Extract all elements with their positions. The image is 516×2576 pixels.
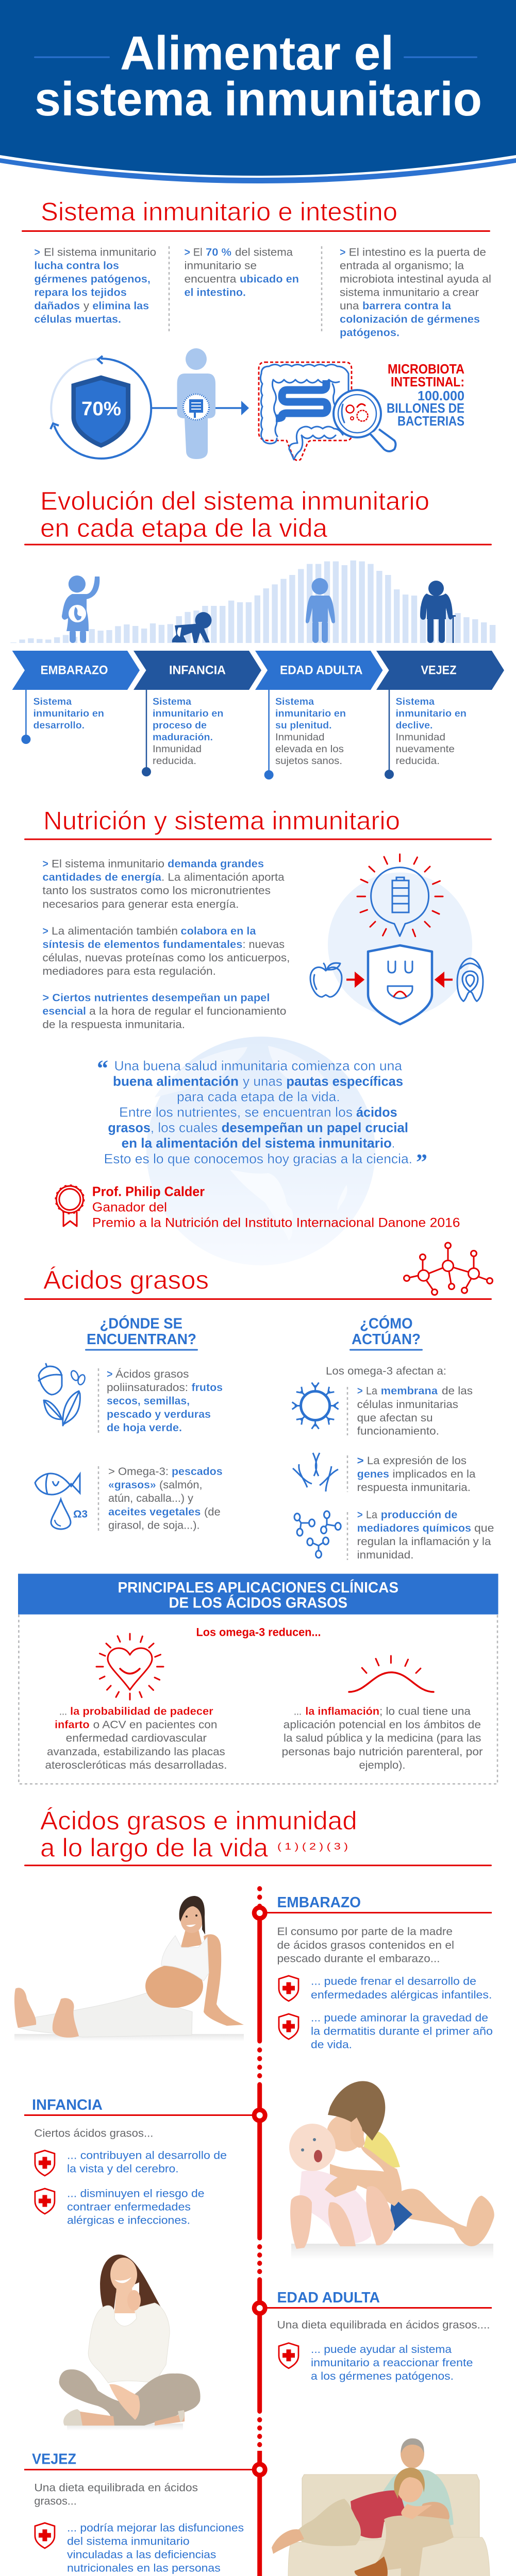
stage note: vejez	[385, 690, 467, 779]
text: infarto: infarto	[55, 1719, 90, 1731]
stage note: embarazo: Sistema	[33, 696, 72, 707]
text: genes: genes	[357, 1468, 389, 1480]
text block: nutrición: . La alimentación aporta	[161, 872, 285, 884]
heading: ácidos grasos	[24, 1266, 492, 1300]
text block: nutrición: a la hora de regular el funcionamiento	[89, 1006, 286, 1018]
stage: vejez: vinculadas a las deficiencias	[67, 2549, 216, 2561]
text: inflamación: personas bajo nutrición parenteral, por	[281, 1746, 483, 1758]
stage: vejez: grasos...	[34, 2495, 77, 2507]
stage note: vejez: reducida.	[396, 755, 440, 767]
stage: edad adulta: a los gérmenes patógenos.	[311, 2370, 454, 2382]
icon: nuts and leaves	[39, 1364, 86, 1426]
stage note: infancia: proceso de	[153, 720, 207, 731]
text block: nutrición: La alimentación también	[52, 925, 178, 937]
icon: shield with cross	[279, 2343, 298, 2368]
text: ácidos grasos poliinsaturados: secos, semillas,	[107, 1395, 190, 1407]
heading: nutrición	[24, 806, 492, 840]
text: inflamación: la salud pública y la medicina (para las	[284, 1733, 481, 1744]
icon: shield with cross	[35, 2150, 55, 2176]
text block: nutrición: mediadores para esta regulación.	[42, 965, 216, 977]
text: omega-3: > Omega-3:	[108, 1466, 169, 1478]
icon: crawling baby	[172, 612, 211, 643]
heading: sistema inmunitario e intestino	[22, 197, 490, 232]
text: mediadores	[357, 1509, 494, 1561]
text: los omega-3 afectan a: Los omega-3 afectan a:	[326, 1365, 446, 1377]
text block: nutrición: demanda grandes	[168, 858, 264, 870]
stage: infancia: Ciertos ácidos grasos...	[34, 2128, 153, 2139]
text: mediadores: >	[357, 1509, 363, 1521]
stage note: vejez: Sistema	[396, 696, 435, 707]
stage note: embarazo: inmunitario en	[33, 708, 104, 719]
heading: evolución: en cada etapa de la vida	[40, 514, 327, 543]
text: omega-3: girasol, de soja...).	[108, 1520, 200, 1531]
heading: evolución: Evolución del sistema inmunitario	[40, 486, 429, 515]
stage note: embarazo: desarrollo.	[33, 720, 85, 731]
text: inflamación: aplicación potencial en los ámbitos de	[284, 1719, 481, 1731]
stage: embarazo: El consumo por parte de la madre	[277, 1926, 453, 1938]
chevrons: life stages: INFANCIA	[169, 664, 226, 677]
text: genes	[357, 1455, 476, 1494]
text: mediadores: producción de	[381, 1509, 457, 1521]
banner: aplicaciones clínicas: PRINCIPALES APLICACIONES CLÍNICAS	[118, 1579, 398, 1596]
text block: nutrición: > Ciertos nutrientes desempeñan un papel	[42, 992, 270, 1004]
stage note: infancia: Inmunidad	[153, 743, 202, 755]
quote: ”	[416, 1149, 427, 1175]
heading: cómo actúan: ¿CÓMO	[360, 1315, 413, 1332]
text: omega-3: «grasos»	[108, 1479, 156, 1491]
text column: lucha contra patógenos	[34, 246, 156, 326]
icon: adult	[306, 578, 335, 643]
stage note: embarazo	[21, 690, 104, 744]
stage: infancia: alérgicas e infecciones.	[67, 2215, 190, 2227]
stage: vejez: ... podría mejorar las disfunciones	[67, 2522, 244, 2534]
quote: Entre los nutrientes, se encuentran los	[119, 1105, 353, 1120]
icon: fish and omega-3 drop: Ω3	[73, 1509, 88, 1520]
quote author: Prof. Philip Calder	[92, 1183, 205, 1199]
text: mediadores: que	[474, 1522, 494, 1534]
icon: fish and omega-3 drop	[35, 1473, 88, 1529]
quote: .	[392, 1135, 395, 1150]
text: mediadores: inmunidad.	[357, 1549, 413, 1561]
text column: lucha contra patógenos: elimina las	[92, 300, 149, 312]
stage: edad adulta: Una dieta equilibrada en ácidos grasos....	[277, 2319, 490, 2331]
icon: shield 70% with cycle arrows	[51, 356, 151, 459]
heading: dónde se encuentran: ¿DÓNDE SE	[100, 1315, 182, 1332]
text: inflamación	[281, 1706, 483, 1771]
icon: inflammation curve	[349, 1656, 434, 1692]
quote: “	[97, 1056, 108, 1081]
stage note: edad adulta	[264, 690, 346, 779]
icon: shield with cross	[35, 2189, 55, 2214]
callout: microbiota intestinal: MICROBIOTA	[388, 361, 464, 377]
text: omega-3: pescados	[172, 1466, 223, 1478]
title: Alimentar el	[120, 26, 394, 80]
text: ácidos grasos poliinsaturados: >	[107, 1368, 112, 1380]
text: omega-3: (de	[204, 1506, 221, 1518]
text block: nutrición	[42, 858, 290, 1031]
text: membrana: que afectan su	[357, 1412, 433, 1424]
quote author: Premio a la Nutrición del Instituto Internacional Danone 2016	[92, 1215, 460, 1230]
stage: vejez	[24, 2451, 254, 2576]
stage: infancia: ... disminuyen el riesgo de	[67, 2188, 204, 2200]
callout: microbiota intestinal: INTESTINAL:	[391, 374, 464, 389]
text block: nutrición: >	[42, 858, 48, 870]
text: omega-3: aceites vegetales	[108, 1506, 201, 1518]
text: omega-3: atún, caballa...) y	[108, 1493, 194, 1504]
text column: lucha contra patógenos: y	[84, 300, 90, 312]
text: infarto: o ACV en pacientes con	[93, 1719, 217, 1731]
bar chart: immune system over life	[10, 561, 495, 643]
icon: shield 70% with cycle arrows: 70%	[81, 398, 121, 420]
text column: 70 %: encuentra	[185, 273, 237, 285]
stage: infancia: la vista y del cerebro.	[67, 2163, 179, 2175]
text: infarto: la probabilidad de padecer	[70, 1706, 213, 1718]
text block: nutrición: El sistema inmunitario	[52, 858, 164, 870]
chevrons: life stages: EMBARAZO	[40, 664, 108, 677]
title: sistema inmunitario	[35, 72, 482, 126]
text column: lucha contra patógenos: >	[34, 246, 40, 259]
stage note: vejez: nuevamente	[396, 743, 455, 755]
stage note: edad adulta: inmunitario en	[275, 708, 346, 719]
chevrons: life stages: EDAD ADULTA	[280, 664, 363, 677]
text: infarto: ateroscleróticas más desarrolladas.	[45, 1759, 227, 1771]
text: inflamación: ...	[294, 1706, 302, 1718]
text: inflamación: ; lo cual tiene una	[379, 1706, 471, 1718]
heading: evolución	[24, 486, 492, 545]
text: infarto	[45, 1706, 227, 1771]
background: globe	[146, 1037, 375, 1265]
stage: edad adulta	[266, 2290, 492, 2382]
text column: puerta de entrada: >	[340, 246, 345, 259]
icon: shield with cross	[279, 1976, 298, 2001]
stage: embarazo: enfermedades alérgicas infantiles.	[311, 1989, 492, 2001]
text: ácidos grasos poliinsaturados: poliinsaturados:	[107, 1382, 188, 1394]
timeline: red line with nodes	[246, 1886, 273, 2576]
text block: nutrición: células, nuevas proteínas como los anticuerpos,	[42, 952, 290, 964]
text: membrana: funcionamiento.	[357, 1425, 439, 1437]
heading: ácidos grasos e inmunidad: ( 1 ) ( 2 ) ( 3 )	[277, 1841, 348, 1852]
icon: heart	[96, 1634, 163, 1700]
text: membrana: membrana	[381, 1385, 438, 1397]
photo: boy hugging baby	[289, 2081, 494, 2259]
text: ácidos grasos poliinsaturados	[107, 1368, 223, 1434]
text column: 70 %: 70 %	[206, 246, 231, 259]
quote	[97, 1056, 427, 1175]
text: membrana: células inmunitarias	[357, 1399, 458, 1411]
stage note: infancia: inmunitario en	[153, 708, 224, 719]
stage note: vejez: declive.	[396, 720, 433, 731]
chevrons: life stages	[12, 651, 504, 690]
stage note: infancia: reducida.	[153, 755, 196, 767]
text column: lucha contra patógenos: gérmenes patógenos,	[34, 273, 151, 285]
photo: pregnant woman	[14, 1896, 244, 2041]
stage: infancia	[24, 2097, 254, 2227]
stage: infancia: contraer enfermedades	[67, 2201, 191, 2213]
banner: aplicaciones clínicas	[18, 1574, 498, 1615]
text: infarto: enfermedad cardiovascular	[66, 1733, 207, 1744]
text block: nutrición: de la respuesta inmunitaria.	[42, 1019, 185, 1031]
icon: pregnant woman	[62, 575, 99, 643]
quote author	[92, 1183, 460, 1230]
stage: embarazo: ... puede aminorar la gravedad de	[311, 2012, 488, 2024]
stage: vejez: VEJEZ	[32, 2451, 76, 2468]
stage: vejez: del sistema inmunitario	[67, 2536, 190, 2548]
quote: , los cuales	[151, 1120, 218, 1135]
heading: ácidos grasos e inmunidad: Ácidos grasos e inmunidad	[40, 1806, 357, 1835]
text column: 70 %: el intestino.	[185, 286, 246, 298]
stage note: edad adulta: Inmunidad	[275, 732, 325, 743]
stage note: vejez: inmunitario en	[396, 708, 467, 719]
text column: lucha contra patógenos: El sistema inmunitario	[44, 246, 156, 259]
text block: nutrición: cantidades de energía	[42, 872, 161, 884]
icon: human body with intestine and arrow	[151, 348, 249, 459]
text: mediadores: regulan la inflamación y la	[357, 1536, 491, 1548]
stage note: edad adulta: sujetos sanos.	[275, 755, 342, 767]
heading: dónde se encuentran	[85, 1315, 198, 1351]
stage note: infancia: Sistema	[153, 696, 191, 707]
stage: embarazo: EMBARAZO	[277, 1894, 361, 1911]
text block: nutrición: tanto los sustratos como los micronutrientes	[42, 885, 271, 897]
text: omega-3	[108, 1466, 223, 1531]
quote: ácidos	[356, 1105, 397, 1120]
icon: chemical mediators	[294, 1511, 341, 1558]
title	[35, 26, 482, 126]
text: inflamación: ejemplo).	[359, 1759, 405, 1771]
chevrons: life stages: VEJEZ	[421, 664, 457, 677]
stage: edad adulta: inmunitario a reaccionar frente	[311, 2357, 473, 2369]
stage: embarazo: de vida.	[311, 2039, 352, 2051]
text column: 70 %: ubicado en	[240, 273, 299, 285]
photo: woman sitting cross-legged	[59, 2255, 201, 2431]
text block: nutrición: colabora en la	[180, 925, 256, 937]
text column: puerta de entrada: colonización de gérmenes	[340, 313, 480, 326]
icon: genes	[293, 1453, 338, 1492]
text: genes: respuesta inmunitaria.	[357, 1482, 471, 1494]
text column: lucha contra patógenos: dañados	[34, 300, 80, 312]
heading: dónde se encuentran: ENCUENTRAN?	[87, 1331, 196, 1348]
text column: 70 %: inmunitario se	[185, 260, 257, 272]
quote: buena alimentación	[113, 1073, 239, 1089]
text column: puerta de entrada: microbiota intestinal ayuda al	[340, 273, 491, 285]
stage note: edad adulta: Sistema	[275, 696, 314, 707]
text: ácidos grasos poliinsaturados: de hoja verde.	[107, 1422, 182, 1434]
text column: 70 %: del sistema	[235, 246, 293, 259]
icon: shield with cross	[35, 2523, 55, 2548]
text: inflamación: la inflamación	[305, 1706, 379, 1718]
text block: nutrición: esencial	[42, 1006, 86, 1018]
callout: microbiota intestinal: BACTERIAS	[397, 413, 464, 429]
callout: microbiota intestinal: 100.000	[418, 388, 464, 403]
text column: 70 %: El	[193, 246, 203, 259]
quote author: Ganador del	[92, 1200, 167, 1214]
text: membrana: La	[366, 1385, 377, 1397]
text block: nutrición: : nuevas	[242, 939, 285, 951]
quote: grasos	[108, 1120, 151, 1135]
text column: puerta de entrada: entrada al organismo; la	[340, 260, 464, 272]
icon: elderly person with cane	[420, 581, 456, 643]
heading: ácidos grasos e inmunidad: a lo largo de la vida	[40, 1833, 268, 1862]
header banner	[0, 0, 516, 183]
text: infarto: ...	[59, 1706, 67, 1718]
text column: 70 %: >	[185, 246, 190, 259]
stage: embarazo	[266, 1894, 493, 2051]
photo: senior couple on sofa	[272, 2438, 490, 2576]
stage note: infancia: maduración.	[153, 732, 213, 743]
icon: shield with cross	[279, 2014, 298, 2039]
stage: embarazo: de ácidos grasos contenidos en el	[277, 1939, 454, 1951]
stage: infancia: INFANCIA	[32, 2097, 103, 2113]
text block: nutrición: necesarios para generar esta energía.	[42, 899, 239, 910]
icon: cell membrane	[292, 1383, 339, 1429]
text: ácidos grasos poliinsaturados: Ácidos grasos	[115, 1368, 189, 1380]
stage: embarazo: pescado durante el embarazo...	[277, 1953, 440, 1965]
stage note: edad adulta: su plenitud.	[275, 720, 332, 731]
text: genes: > La expresión de los	[357, 1455, 467, 1467]
stage note: infancia	[142, 690, 224, 776]
callout: microbiota intestinal	[387, 361, 464, 429]
heading: ácidos grasos e inmunidad	[24, 1806, 492, 1866]
stage note: edad adulta: elevada en los	[275, 743, 344, 755]
text: ácidos grasos poliinsaturados: frutos	[192, 1382, 223, 1394]
quote: y unas	[243, 1073, 282, 1089]
text column: lucha contra patógenos: lucha contra los	[34, 260, 119, 272]
text: ácidos grasos poliinsaturados: pescado y verduras	[107, 1409, 211, 1420]
callout: microbiota intestinal: BILLONES DE	[387, 400, 464, 416]
stage: edad adulta: ... puede ayudar al sistema	[311, 2344, 452, 2355]
text column: lucha contra patógenos: repara los tejidos	[34, 286, 127, 298]
banner: aplicaciones clínicas: DE LOS ÁCIDOS GRASOS	[169, 1594, 347, 1612]
text column: puerta de entrada	[340, 246, 491, 339]
text: membrana	[357, 1385, 473, 1437]
text column: puerta de entrada: sistema inmunitario a crear	[340, 286, 479, 298]
text block: nutrición: >	[42, 925, 48, 937]
quote: para cada etapa de la vida.	[177, 1089, 340, 1104]
quote: desempeñan un papel crucial	[222, 1120, 408, 1135]
stage: embarazo: la dermatitis durante el primer año	[311, 2026, 493, 2038]
subheading: los omega-3 reducen: Los omega-3 reducen...	[196, 1626, 321, 1639]
text column: 70 %	[185, 246, 299, 298]
text: genes: implicados en la	[393, 1468, 476, 1480]
icon: award rosette	[55, 1185, 84, 1226]
quote: en la alimentación del sistema inmunitario	[122, 1135, 392, 1150]
stage: infancia: ... contribuyen al desarrollo de	[67, 2150, 227, 2162]
quote: pautas específicas	[286, 1073, 403, 1089]
text: membrana: de las	[442, 1385, 473, 1397]
stage: edad adulta: EDAD ADULTA	[277, 2290, 380, 2306]
text column: lucha contra patógenos: células muertas.	[34, 313, 121, 326]
heading: nutrición: Nutrición y sistema inmunitario	[43, 806, 400, 835]
stage note: vejez: Inmunidad	[396, 732, 445, 743]
quote: Esto es lo que conocemos hoy gracias a la ciencia.	[104, 1151, 412, 1166]
heading: cómo actúan: ACTÚAN?	[352, 1330, 421, 1348]
text block: nutrición: síntesis de elementos fundamentales	[42, 939, 242, 951]
text: mediadores: La	[366, 1509, 377, 1521]
icon: molecule	[404, 1243, 493, 1295]
text: membrana: >	[357, 1385, 363, 1397]
text column: puerta de entrada: barrera contra la	[362, 300, 451, 312]
text: infarto: avanzada, estabilizando las placas	[47, 1746, 225, 1758]
icon: energy and immune shield	[310, 854, 483, 1024]
stage: embarazo: ... puede frenar el desarrollo de	[311, 1976, 476, 1988]
text column: puerta de entrada: El intestino es la puerta de	[349, 246, 486, 259]
heading: ácidos grasos: Ácidos grasos	[43, 1266, 209, 1295]
heading: sistema inmunitario e intestino: Sistema inmunitario e intestino	[41, 197, 397, 226]
text column: puerta de entrada: una	[340, 300, 359, 312]
text column: puerta de entrada: patógenos.	[340, 327, 400, 339]
quote: Una buena salud inmunitaria comienza con una	[114, 1058, 403, 1073]
icon: intestine with magnifier	[259, 362, 396, 460]
stage: vejez: Una dieta equilibrada en ácidos	[34, 2482, 198, 2494]
heading: cómo actúan	[349, 1315, 423, 1351]
stage: vejez: nutricionales en las personas	[67, 2563, 221, 2574]
text: mediadores: mediadores químicos	[357, 1522, 471, 1534]
text: omega-3: (salmón,	[159, 1479, 203, 1491]
